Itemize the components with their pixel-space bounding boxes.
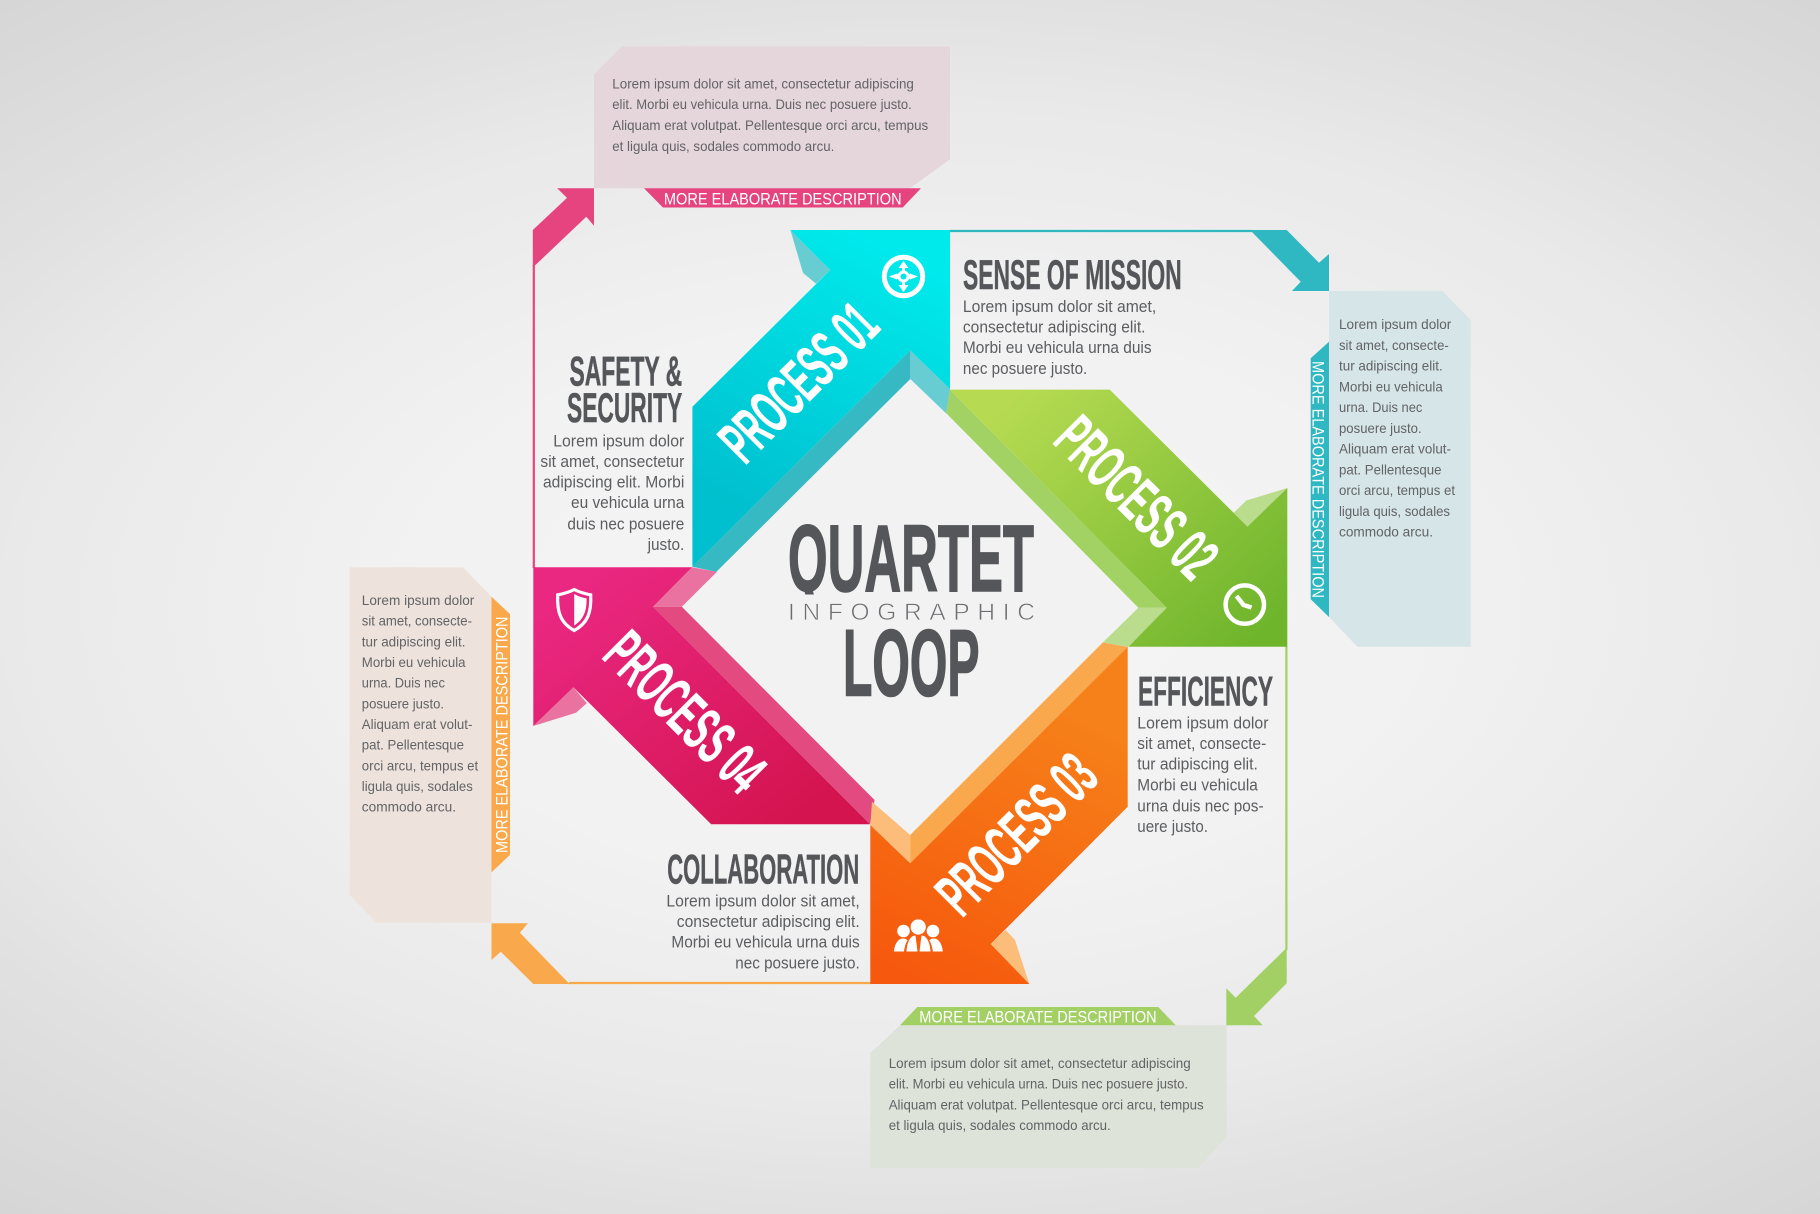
arrow: orange connector xyxy=(492,923,570,984)
panel: description cyan: Morbi eu vehicula xyxy=(1339,378,1443,394)
panel: description cyan: pat. Pellentesque xyxy=(1339,461,1442,477)
arrow: green connector xyxy=(1226,948,1287,1025)
text block: collaboration: nec posuere justo. xyxy=(735,955,860,973)
panel: description orange: Morbi eu vehicula xyxy=(362,654,466,670)
panel: description cyan: posuere justo. xyxy=(1339,420,1422,436)
panel: description cyan: Lorem ipsum dolor xyxy=(1339,316,1452,332)
panel: description cyan: commodo arcu. xyxy=(1339,524,1433,540)
process 02 arrow xyxy=(946,390,1287,647)
panel: description green: et ligula quis, sodales commodo arcu. xyxy=(889,1117,1111,1133)
panel: description pink: MORE ELABORATE DESCRIPTION xyxy=(664,190,902,209)
panel: description pink: Lorem ipsum dolor sit amet, consectetur adipiscing xyxy=(612,75,914,91)
process 03 arrow: PROCESS 03 xyxy=(923,741,1111,929)
text block: safety and security: duis nec posuere xyxy=(567,515,684,533)
panel: description cyan: Aliquam erat volut- xyxy=(1339,441,1451,457)
panel: description green xyxy=(870,1007,1227,1168)
process 01 arrow: PROCESS 01 xyxy=(706,290,892,476)
title: QUARTET xyxy=(788,506,1034,612)
panel: description orange: urna. Duis nec xyxy=(362,675,445,691)
panel: description cyan xyxy=(1308,291,1471,647)
text block: collaboration xyxy=(666,846,860,973)
title: LOOP xyxy=(843,610,980,716)
panel: description green: elit. Morbi eu vehicula urna. Duis nec posuere justo. xyxy=(889,1076,1188,1092)
text block: sense of mission: SENSE OF MISSION xyxy=(963,252,1182,298)
panel: description cyan: tur adipiscing elit. xyxy=(1339,358,1443,374)
text block: safety and security: SAFETY & xyxy=(570,348,682,394)
text block: safety and security xyxy=(540,348,685,554)
text block: efficiency: Lorem ipsum dolor xyxy=(1137,714,1269,732)
panel: description orange: commodo arcu. xyxy=(362,799,456,815)
title: INFOGRAPHIC xyxy=(788,599,1035,626)
text block: sense of mission: Morbi eu vehicula urna duis xyxy=(963,339,1152,357)
text block: efficiency: EFFICIENCY xyxy=(1138,668,1273,714)
panel: description orange: MORE ELABORATE DESCRIPTION xyxy=(493,616,512,853)
process 04 arrow xyxy=(533,567,875,824)
process 04 arrow: PROCESS 04 xyxy=(591,618,779,807)
panel: description green: MORE ELABORATE DESCRIPTION xyxy=(919,1008,1157,1027)
text block: efficiency: Morbi eu vehicula xyxy=(1137,777,1259,795)
panel: description cyan: orci arcu, tempus et xyxy=(1339,482,1455,498)
text block: safety and security: Lorem ipsum dolor xyxy=(553,432,685,450)
outer frame lines xyxy=(534,231,1286,983)
text block: safety and security: justo. xyxy=(647,536,684,554)
panel: description pink: et ligula quis, sodales commodo arcu. xyxy=(612,138,834,154)
panel: description orange: ligula quis, sodales xyxy=(362,778,473,794)
process 01 arrow xyxy=(692,230,950,572)
icon: clock xyxy=(1226,585,1264,624)
panel: description cyan: urna. Duis nec xyxy=(1339,399,1422,415)
text block: safety and security: adipiscing elit. Morbi xyxy=(543,474,684,492)
text block: sense of mission: consectetur adipiscing elit. xyxy=(963,318,1146,336)
panel: description pink: Aliquam erat volutpat. Pellentesque orci arcu, tempus xyxy=(612,117,928,133)
panel: description orange: tur adipiscing elit. xyxy=(362,633,466,649)
text block: efficiency: uere justo. xyxy=(1137,818,1208,836)
text block: collaboration: Morbi eu vehicula urna duis xyxy=(671,934,860,952)
text block: sense of mission xyxy=(963,252,1182,378)
text block: efficiency: tur adipiscing elit. xyxy=(1137,756,1258,774)
title xyxy=(780,506,1040,716)
process 03 arrow xyxy=(870,642,1128,984)
process 02 arrow: PROCESS 02 xyxy=(1041,403,1231,593)
panel: description orange: Lorem ipsum dolor xyxy=(362,592,475,608)
panel: description cyan: ligula quis, sodales xyxy=(1339,503,1450,519)
text block: safety and security: SECURITY xyxy=(567,385,682,431)
text block: collaboration: Lorem ipsum dolor sit amet, xyxy=(666,893,860,911)
text block: sense of mission: Lorem ipsum dolor sit amet, xyxy=(963,298,1156,316)
text block: collaboration: consectetur adipiscing elit. xyxy=(677,913,860,931)
panel: description orange xyxy=(350,567,512,923)
text block: collaboration: COLLABORATION xyxy=(667,846,859,892)
panel: description orange: sit amet, consecte- xyxy=(362,613,472,629)
text block: efficiency xyxy=(1137,668,1273,836)
icon: compass xyxy=(884,257,923,296)
text block: efficiency: sit amet, consecte- xyxy=(1137,735,1266,753)
panel: description green: Aliquam erat volutpat. Pellentesque orci arcu, tempus xyxy=(889,1096,1204,1112)
centre diamond xyxy=(682,379,1138,835)
arrow: pink connector xyxy=(533,188,594,268)
text block: safety and security: eu vehicula urna xyxy=(571,494,685,512)
icon: shield xyxy=(558,590,591,630)
panel: description cyan: MORE ELABORATE DESCRIPTION xyxy=(1308,361,1328,598)
text block: efficiency: urna duis nec pos- xyxy=(1137,797,1264,815)
text block: sense of mission: nec posuere justo. xyxy=(963,360,1087,378)
panel: description orange: posuere justo. xyxy=(362,695,444,711)
panel: description orange: pat. Pellentesque xyxy=(362,737,464,753)
arrow: cyan connector xyxy=(1250,230,1329,291)
panel: description cyan: sit amet, consecte- xyxy=(1339,337,1449,353)
icon: people xyxy=(894,919,943,952)
text block: safety and security: sit amet, consectetur xyxy=(540,453,685,471)
panel: description pink: elit. Morbi eu vehicula urna. Duis nec posuere justo. xyxy=(612,96,912,112)
panel: description orange: orci arcu, tempus et xyxy=(362,757,478,773)
panel: description orange: Aliquam erat volut- xyxy=(362,716,473,732)
panel: description pink xyxy=(594,46,950,209)
panel: description green: Lorem ipsum dolor sit amet, consectetur adipiscing xyxy=(889,1055,1191,1071)
